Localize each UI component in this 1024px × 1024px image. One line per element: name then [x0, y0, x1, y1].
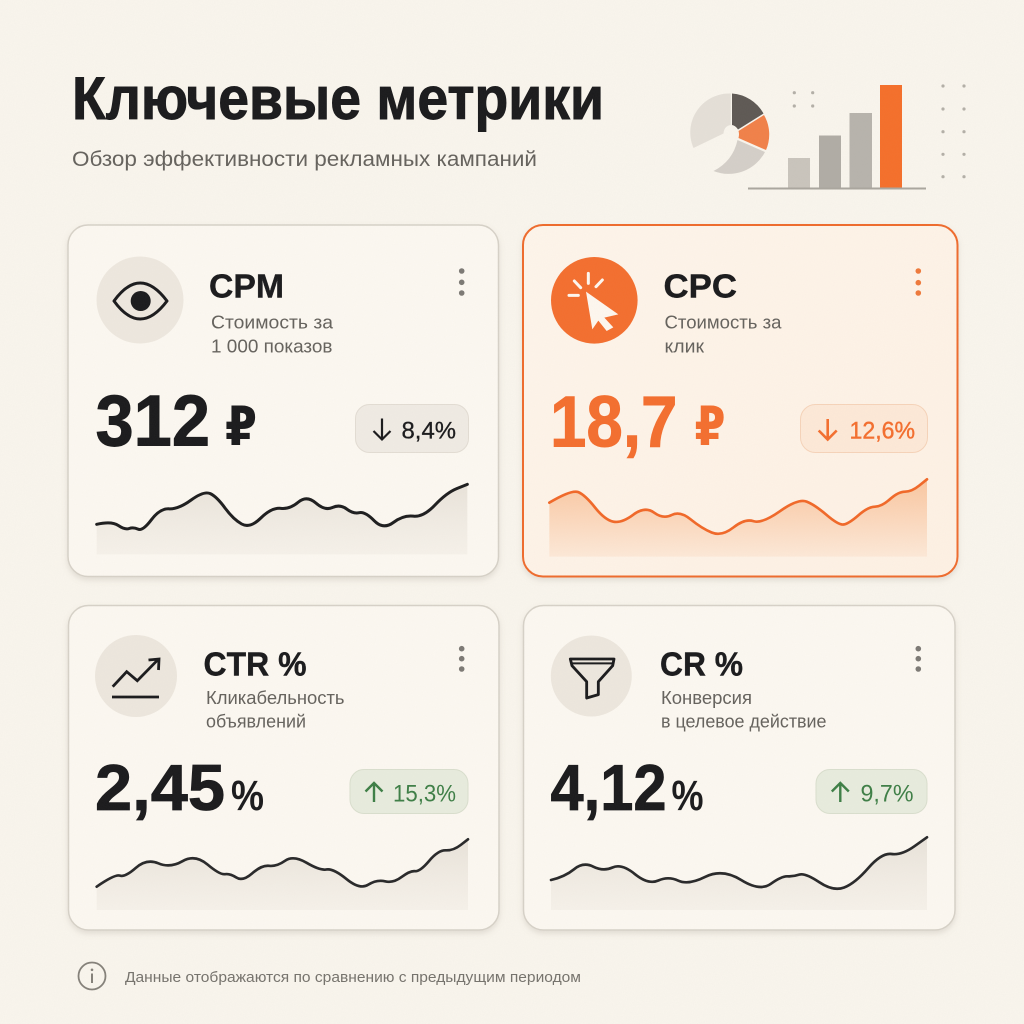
- footer note: Данные отображаются по сравнению с предыдущим периодом: [125, 970, 581, 986]
- change badge: [356, 404, 468, 452]
- panel: CPM: [68, 225, 498, 576]
- description: объявлений: [206, 711, 306, 731]
- value: 18,7: [550, 382, 678, 462]
- metric name: CTR %: [204, 645, 306, 682]
- menu dots: [459, 268, 465, 296]
- sparkline: [97, 484, 467, 554]
- description: [664, 312, 783, 357]
- icon: trend chart: [95, 635, 177, 717]
- value: %: [672, 772, 704, 820]
- description: Стоимость за: [664, 312, 783, 332]
- icon: cursor click: [551, 257, 638, 344]
- panel: CTR: [68, 606, 499, 930]
- description: клик: [664, 337, 704, 357]
- description: в целевое действие: [661, 711, 826, 731]
- metric name: CR %: [660, 645, 743, 682]
- bar chart: [748, 85, 926, 190]
- menu dots: [459, 646, 465, 672]
- metric name: CPM: [209, 268, 284, 305]
- value: 312: [96, 382, 210, 462]
- description: [206, 688, 344, 731]
- metric name: CPC: [664, 268, 737, 305]
- change badge: 8,4%: [402, 417, 456, 444]
- value: ₽: [694, 397, 726, 457]
- icon: info: [78, 962, 106, 990]
- sparkline: [97, 839, 468, 910]
- value: 4,12: [550, 751, 666, 824]
- value: %: [231, 772, 264, 820]
- change badge: 12,6%: [850, 418, 915, 445]
- header illustration: pie and bar chart: [690, 84, 966, 190]
- icon: eye: [96, 256, 184, 344]
- description: [211, 312, 334, 357]
- panel: CR: [524, 606, 955, 930]
- icon: funnel: [551, 636, 632, 716]
- description: 1 000 показов: [211, 337, 332, 357]
- menu dots: [916, 268, 921, 296]
- change badge: [800, 404, 928, 452]
- menu dots: [916, 646, 921, 672]
- change badge: [350, 770, 468, 814]
- sparkline: [551, 837, 927, 910]
- description: Конверсия: [661, 688, 752, 708]
- title: Ключевые метрики: [72, 65, 604, 132]
- pie chart: [690, 93, 769, 174]
- change badge: 15,3%: [393, 781, 456, 808]
- value: 2,45: [95, 751, 225, 824]
- sparkline: [549, 479, 927, 557]
- value: ₽: [225, 397, 257, 457]
- description: Кликабельность: [206, 688, 344, 708]
- footer note: [78, 962, 581, 990]
- subtitle: Обзор эффективности рекламных кампаний: [72, 148, 537, 171]
- change badge: [816, 770, 927, 814]
- panel: CPC: [523, 225, 958, 576]
- change badge: 9,7%: [860, 781, 914, 808]
- description: Стоимость за: [211, 312, 334, 332]
- description: [661, 688, 826, 731]
